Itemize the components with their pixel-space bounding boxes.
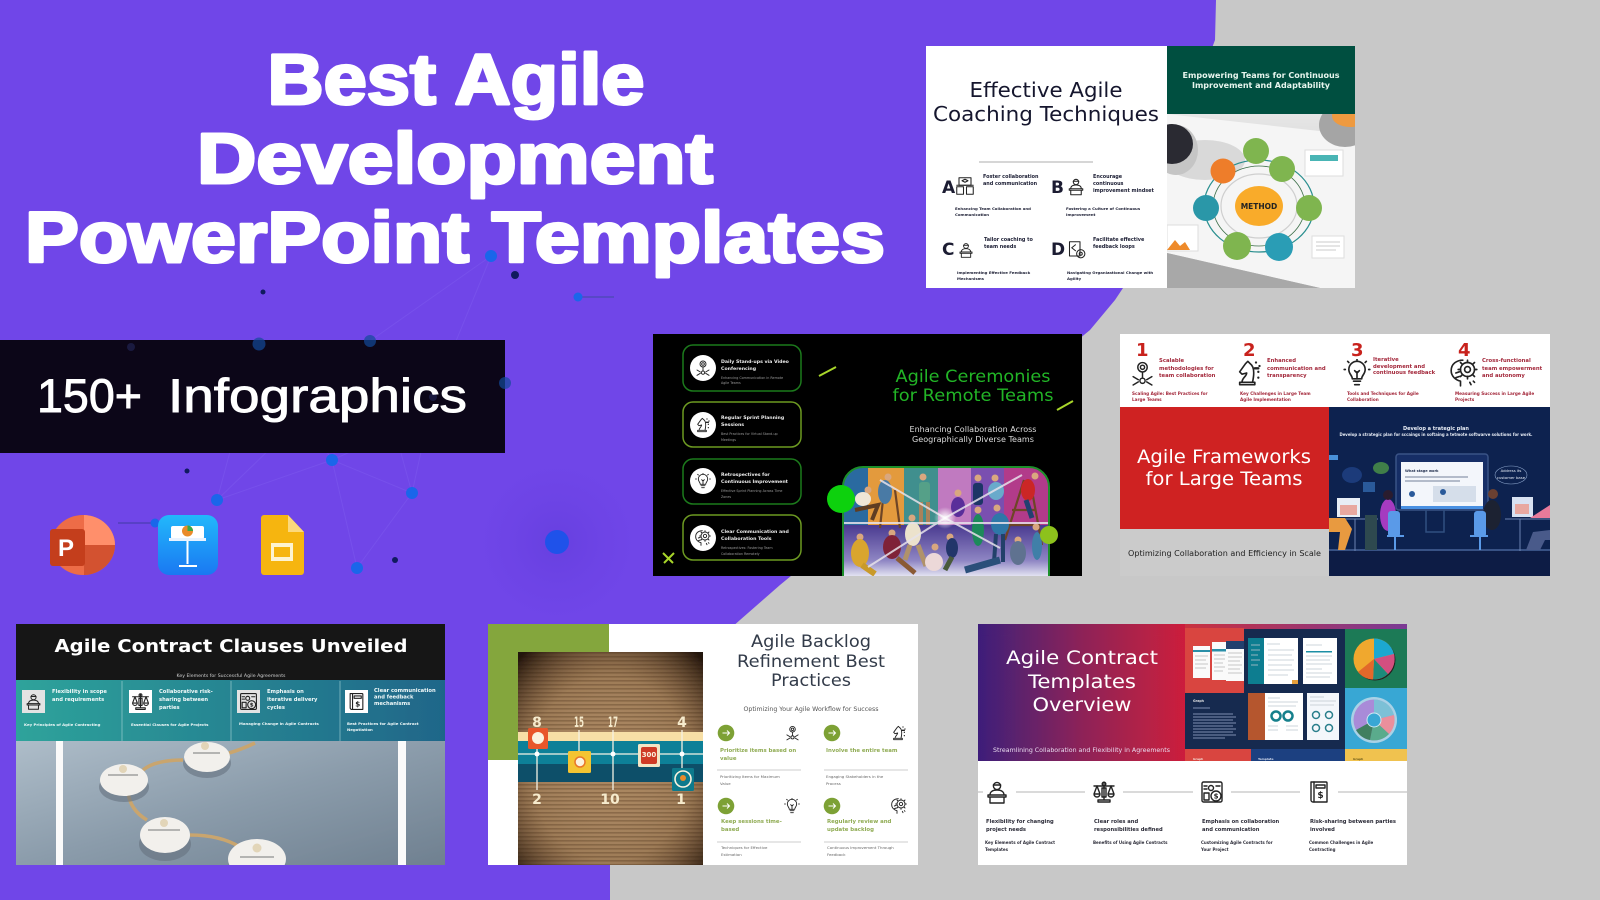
timeline wood image: 2 — [532, 792, 542, 808]
column 2: enhanced communication: Enhanced — [1267, 358, 1296, 364]
column 3: iterative development: Iterative — [1373, 357, 1399, 363]
heading: coaching title: Effective Agile — [970, 78, 1122, 102]
timeline wood image — [518, 652, 703, 865]
clause 4: Best Practices for Agile Contract — [347, 721, 419, 726]
clause 2 — [129, 689, 213, 727]
column 4: cross-functional: team empowerment — [1482, 366, 1543, 372]
column: flexibility: Templates — [985, 847, 1009, 852]
clause 1: Flexibility in scope — [52, 689, 107, 695]
column 2: enhanced communication: Key Challenges in Large Team — [1240, 391, 1311, 396]
green header — [1167, 46, 1355, 114]
heading: ceremonies title: Agile Ceremonies — [896, 367, 1051, 387]
column 2: enhanced communication: 2 — [1243, 340, 1256, 361]
panel: Agile Contract Templates Overview — [978, 624, 1407, 865]
photo: connected discs — [16, 741, 445, 865]
card: clear communication — [683, 515, 801, 560]
template collage: Graph — [1193, 757, 1203, 761]
background: soft glow circle — [472, 457, 642, 627]
item B: continuous improvement: Encourage — [1093, 174, 1123, 180]
card: daily stand-ups: Daily Stand-ups via Video — [721, 359, 790, 365]
item B: continuous improvement: continuous — [1093, 181, 1124, 187]
black title band: Agile Contract Clauses Unveiled — [54, 636, 408, 657]
column 2: enhanced communication — [1240, 340, 1326, 402]
clause 3: cycles — [267, 705, 285, 711]
column 1: scalable methodologies — [1132, 340, 1216, 402]
item A: foster collaboration: and communication — [983, 181, 1038, 187]
subtitle: Enhancing Collaboration Across — [910, 425, 1036, 434]
title: Development — [197, 120, 713, 199]
wheel diagram — [1351, 697, 1397, 743]
clause 4 — [345, 688, 436, 732]
people group — [851, 472, 1042, 574]
decorative lime accents — [663, 367, 1073, 563]
column 4: cross-functional: and autonomy — [1482, 373, 1525, 379]
practice 1: value — [720, 756, 737, 762]
gradient title banner: Agile Contract — [1006, 647, 1158, 669]
panel: Agile Ceremonies for Remote Teams — [653, 334, 1082, 576]
column: flexibility: project needs — [986, 827, 1026, 833]
item D: feedback loops: Facilitate effective — [1093, 237, 1145, 243]
green circle accent — [827, 485, 855, 513]
column 3: iterative development: development and — [1373, 364, 1425, 370]
column: flexibility: Key Elements of Agile Contract — [985, 840, 1055, 845]
banner: 150+ Infographics: 150+ — [37, 369, 142, 422]
template collage: Graph — [1193, 699, 1205, 703]
card: retrospectives: Retrospectives for — [721, 472, 770, 478]
card: clear communication: Retrospectives: Fostering Team — [721, 546, 773, 550]
item B: continuous improvement — [1051, 174, 1154, 217]
item D: feedback loops — [1051, 237, 1153, 281]
clause 4: Negotiation — [347, 727, 373, 732]
item B: continuous improvement: improvement mindset — [1093, 188, 1154, 194]
practice 3: Techniques for Effective — [720, 845, 768, 850]
green header: Improvement and Adaptability — [1192, 81, 1331, 90]
item C: tailor coaching: Tailor coaching to — [984, 237, 1033, 243]
practice 4: Continuous Improvement Through — [827, 845, 894, 850]
column 3: iterative development: Tools and Techniques for Agile — [1347, 391, 1419, 396]
card: clear communication: Collaboration Tools — [721, 536, 772, 542]
clause 3: iterative delivery — [267, 697, 318, 703]
background: purple diagonal shape — [0, 0, 1216, 900]
column 3: iterative development — [1344, 340, 1436, 402]
method diagram photo: METHOD — [1241, 202, 1277, 211]
clause 3: Managing Change in Agile Contracts — [239, 721, 320, 726]
gradient title banner — [978, 624, 1185, 761]
banner: 150+ Infographics: Infographics — [168, 369, 467, 422]
panel: Effective Agile Coaching Techniques — [926, 46, 1371, 288]
red title block — [1120, 407, 1329, 529]
card: retrospectives: Zones — [721, 495, 731, 499]
timeline wood image: 10 — [600, 792, 620, 808]
practice 2 — [824, 725, 908, 786]
column: flexibility: Flexibility for changing — [986, 819, 1054, 825]
card: sprint planning: Meetings — [721, 438, 736, 442]
card: clear communication: Collaboration Remotely — [721, 552, 760, 556]
title: Best Agile — [268, 41, 644, 120]
heading: ceremonies title — [892, 367, 1054, 406]
olive block — [488, 624, 609, 760]
green header: Empowering Teams for Continuous — [1182, 71, 1340, 80]
item A: foster collaboration: A — [942, 178, 956, 198]
clause 1: Key Principles of Agile Contracting — [24, 722, 101, 727]
heading: coaching title: Coaching Techniques — [933, 102, 1159, 126]
subtitle: Geographically Diverse Teams — [912, 435, 1034, 444]
item C: tailor coaching — [942, 237, 1033, 281]
practice 1: Prioritizing Items for Maximum — [720, 774, 780, 779]
item A: foster collaboration: Communication — [955, 212, 989, 217]
timeline wood image: 300 — [642, 751, 656, 759]
clause 1 — [22, 689, 107, 727]
column 3: iterative development: continuous feedback — [1373, 370, 1436, 376]
card: daily stand-ups: Conferencing — [721, 366, 756, 372]
card: sprint planning: Best Practices for Virtual Stand-up — [721, 432, 778, 436]
template collage: Template — [1258, 757, 1273, 761]
column 1: scalable methodologies: Scaling Agile: Best Practices for — [1132, 391, 1209, 396]
item C: tailor coaching: C — [942, 240, 954, 260]
item D: feedback loops: feedback loops — [1093, 244, 1135, 250]
panel: Agile Contract Clauses Unveiled — [16, 624, 445, 886]
subtitle: Optimizing Your Agile Workflow for Success — [744, 706, 878, 713]
template collage: Graph — [1353, 757, 1363, 761]
card: sprint planning: Sessions — [721, 422, 744, 428]
red title block: for Large Teams — [1146, 468, 1302, 490]
column: risk-sharing: Risk-sharing between parties — [1310, 819, 1396, 825]
practice 3 — [717, 798, 801, 857]
card: retrospectives: Continuous Improvement — [721, 479, 789, 485]
column 2: enhanced communication: Agile Implementation — [1240, 397, 1291, 402]
column 4: cross-functional — [1451, 340, 1543, 402]
item D: feedback loops: Agility — [1067, 276, 1082, 281]
clause 4: Clear communication — [374, 688, 436, 694]
practice 2: Engaging Stakeholders in the — [826, 774, 884, 779]
item C: tailor coaching: Implementing Effective Feedback — [957, 270, 1031, 275]
column 2: enhanced communication: communication and — [1267, 366, 1326, 372]
navy office illustration: Address its — [1501, 468, 1521, 473]
icon: Google Slides — [261, 515, 304, 575]
timeline wood image: 15 — [574, 715, 584, 731]
gradient title banner: Templates — [1027, 671, 1136, 693]
pie chart — [1354, 638, 1396, 680]
clause 2: sharing between — [159, 697, 208, 703]
card: clear communication: Clear Communication and — [721, 529, 789, 535]
column: collaboration: Your Project — [1200, 847, 1229, 852]
column 4: cross-functional: Cross-functional — [1482, 358, 1531, 364]
method diagram photo — [1167, 114, 1355, 288]
team illustration — [843, 467, 1049, 576]
column 4: cross-functional: 4 — [1458, 340, 1471, 361]
navy office illustration: customer base — [1497, 475, 1526, 480]
red title block: Agile Frameworks — [1137, 446, 1311, 468]
panel: Agile Backlog Refinement Best Practices — [488, 624, 918, 865]
column 3: iterative development: Collaboration — [1347, 397, 1379, 402]
item A: foster collaboration: Enhancing Team Collaboration and — [955, 206, 1031, 211]
card: retrospectives — [683, 459, 801, 504]
practice 3: based — [721, 827, 739, 833]
item C: tailor coaching: team needs — [984, 244, 1016, 250]
template collage — [1185, 624, 1407, 761]
teal column band — [16, 680, 445, 741]
column: risk-sharing: Contracting — [1309, 847, 1336, 852]
card: daily stand-ups: Agile Teams — [721, 381, 741, 385]
heading: backlog title: Refinement Best — [737, 652, 885, 672]
column: risk-sharing — [1309, 782, 1396, 852]
clause 2: Collaborative risk- — [159, 689, 213, 695]
column: collaboration — [1200, 782, 1280, 852]
black title band: Key Elements for Successful Agile Agreements — [176, 673, 286, 679]
clause 4: mechanisms — [374, 701, 410, 707]
navy office illustration: Develop a trategic plan — [1403, 426, 1469, 432]
card: sprint planning: Regular Sprint Planning — [721, 415, 784, 421]
column: flexibility — [985, 782, 1055, 852]
heading: coaching title — [933, 78, 1159, 126]
practice 4 — [824, 798, 908, 857]
clause 3: Emphasis on — [267, 689, 304, 695]
timeline divider — [978, 791, 1407, 793]
black title band — [16, 624, 445, 680]
frame of illustration — [843, 467, 1049, 576]
column: clear roles: Clear roles and — [1094, 819, 1138, 825]
column 2: enhanced communication: transparency — [1267, 373, 1307, 379]
practice 2: Involve the entire team — [826, 748, 898, 754]
item D: feedback loops: Navigating Organizational Change with — [1067, 270, 1153, 275]
column 1: scalable methodologies: Scalable — [1159, 358, 1185, 364]
panel: Agile Frameworks for Large Teams — [1120, 334, 1550, 576]
card: daily stand-ups — [683, 345, 801, 391]
item B: continuous improvement: Fostering a Culture of Continuous — [1066, 206, 1141, 211]
caption: Optimizing Collaboration and Efficiency in Scale — [1128, 549, 1321, 558]
clause 2: Essential Clauses for Agile Projects — [131, 722, 209, 727]
item C: tailor coaching: Mechanisms — [957, 276, 985, 281]
column 4: cross-functional: Measuring Success in Large Agile — [1455, 391, 1534, 396]
heading: ceremonies title: for Remote Teams — [892, 386, 1054, 406]
column: clear roles: responsibilities defined — [1094, 827, 1163, 833]
column 1: scalable methodologies: methodologies for — [1159, 366, 1214, 372]
column: collaboration: and communication — [1202, 827, 1260, 833]
caption — [1120, 529, 1329, 576]
title — [25, 41, 885, 278]
column 1: scalable methodologies: Large Teams — [1132, 397, 1162, 402]
column 4: cross-functional: Projects — [1455, 397, 1475, 402]
gradient title banner: Overview — [1032, 694, 1132, 716]
icon: PowerPoint — [50, 515, 115, 575]
clause 3 — [237, 689, 320, 726]
card: sprint planning — [683, 402, 801, 447]
divider line — [979, 161, 1093, 163]
heading: backlog title: Agile Backlog — [751, 632, 871, 652]
column: clear roles — [1093, 782, 1168, 845]
icon: Keynote — [158, 515, 218, 575]
column: risk-sharing: involved — [1310, 827, 1335, 833]
practice 1: Prioritize items based on — [720, 748, 796, 754]
navy office illustration: Develop a strategic plan for sccaings in softaing a tetmote softwarve solutions for work. — [1340, 432, 1533, 438]
practice 3: Keep sessions time- — [721, 819, 782, 825]
timeline wood image: 8 — [532, 715, 542, 731]
navy office illustration: What stage work — [1405, 469, 1439, 473]
banner: 150+ Infographics — [0, 335, 511, 453]
gradient title banner: Streamlining Collaboration and Flexibility in Agreements — [993, 748, 1170, 754]
practice 4: Feedback — [827, 852, 846, 857]
column: clear roles: Benefits of Using Agile Contracts — [1093, 840, 1168, 845]
lime circle accent — [1040, 526, 1058, 544]
timeline wood image: 1 — [676, 792, 686, 808]
item A: foster collaboration: Foster collaboration — [983, 174, 1039, 180]
practice 4: Regularly review and — [827, 819, 892, 825]
practice 2: Process — [826, 781, 841, 786]
column 3: iterative development: 3 — [1351, 340, 1364, 361]
practice 4: update backlog — [827, 827, 874, 833]
icon: PowerPoint: P — [58, 535, 74, 562]
card: daily stand-ups: Enhancing Communication in Remote — [721, 376, 783, 380]
clause 2: parties — [159, 705, 180, 711]
practice 3: Estimation — [721, 852, 742, 857]
navy office illustration — [1329, 407, 1550, 576]
item B: continuous improvement: B — [1051, 178, 1064, 198]
clause 1: and requirements — [52, 697, 104, 703]
practice 1 — [717, 725, 801, 786]
item A: foster collaboration — [942, 174, 1039, 217]
item D: feedback loops: D — [1051, 240, 1065, 260]
heading: backlog title: Practices — [771, 671, 851, 691]
column: risk-sharing: Common Challenges in Agile — [1309, 840, 1373, 845]
network of dots and lines — [118, 250, 614, 574]
ladders — [880, 480, 1042, 545]
column: collaboration: Customizing Agile Contracts for — [1201, 840, 1273, 845]
timeline wood image: 17 — [608, 715, 618, 731]
column: collaboration: Emphasis on collaboration — [1202, 819, 1280, 825]
column 1: scalable methodologies: 1 — [1136, 340, 1149, 361]
practice 1: Value — [720, 781, 731, 786]
item B: continuous improvement: Improvement — [1066, 212, 1096, 217]
column 1: scalable methodologies: team collaboration — [1159, 373, 1216, 379]
subtitle — [910, 425, 1036, 444]
timeline wood image: 4 — [677, 715, 687, 731]
heading: backlog title — [737, 632, 885, 691]
card: retrospectives: Effective Sprint Planning Across Time — [721, 489, 782, 493]
clause 4: and feedback — [374, 694, 414, 700]
title: PowerPoint Templates — [25, 199, 885, 278]
